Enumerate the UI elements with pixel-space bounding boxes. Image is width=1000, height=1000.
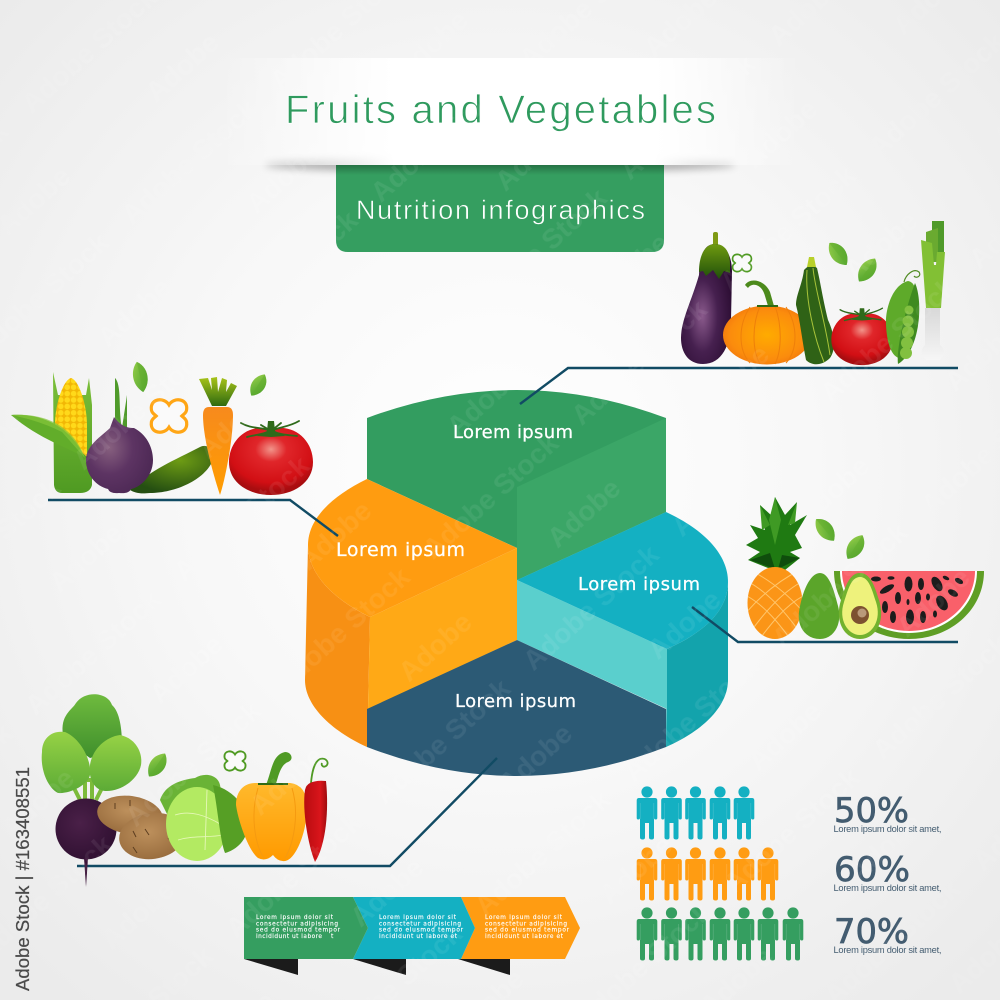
icon: potatoes (95, 792, 188, 863)
icon: chili (304, 759, 328, 862)
ribbon arrow banner (244, 897, 580, 975)
vegetable group: top right (681, 221, 945, 365)
stat: 60% (834, 850, 942, 893)
subtitle panel: Nutrition infographics (356, 195, 645, 225)
stat: 60%: 60% (834, 850, 910, 890)
icon: pineapple (746, 497, 807, 639)
icon: leek (921, 221, 945, 360)
icon: leaf (246, 371, 271, 399)
fold shadows (244, 959, 510, 975)
step: green: sed do eiusmod tempor (256, 928, 341, 934)
segment: green: Lorem ipsum (453, 422, 573, 443)
title: Fruits and Vegetables (285, 88, 716, 132)
3D segmented pie chart (305, 390, 728, 776)
step: teal: sed do eiusmod tempor (379, 928, 464, 934)
icon: yellow pepper (236, 752, 307, 861)
step: green: t (331, 934, 334, 940)
icon: onion (86, 378, 153, 493)
side credit text: Adobe Stock | #163408551 (12, 767, 33, 991)
icon: leaf (824, 238, 853, 269)
icon: pea pod (886, 271, 920, 364)
icon: zucchini (796, 257, 834, 364)
step: orange: sed do eiusmod tempor (485, 928, 570, 934)
segment: orange: Lorem ipsum (336, 539, 465, 561)
icon: carrot (199, 377, 237, 495)
icon: leaf (853, 254, 881, 286)
icon: leaf (143, 749, 171, 781)
step: orange (461, 897, 580, 959)
step: green: consectetur adipisicing (256, 922, 338, 928)
step: orange: consectetur adipisicing (485, 922, 567, 928)
stat: 50%: 50% (834, 791, 909, 831)
segment: navy: Lorem ipsum (455, 691, 576, 712)
icon: tomato (229, 421, 313, 495)
segment: teal (517, 512, 728, 747)
stat: 60%: Lorem ipsum dolor sit amet, (834, 883, 942, 893)
stat: 70% (834, 912, 942, 955)
header: title band (220, 58, 800, 252)
step: green: Lorem ipsum dolor sit (256, 915, 334, 921)
icon: leaf (130, 360, 151, 393)
icon: pepper ring (151, 400, 187, 432)
step: orange: incididunt ut labore et (485, 934, 564, 940)
stat: 50%: Lorem ipsum dolor sit amet, (834, 824, 942, 834)
icon: cucumber (130, 446, 213, 493)
segment: green (367, 390, 666, 580)
step: orange: Lorem ipsum dolor sit (485, 915, 563, 921)
people chart row: 70% (637, 907, 803, 960)
stat: 70%: 70% (834, 912, 909, 952)
segment: orange (305, 479, 517, 747)
icon: watermelon (834, 571, 984, 639)
people chart row: 50% (637, 786, 754, 840)
icon: leaf (811, 514, 840, 545)
step: teal: consectetur adipisicing (379, 922, 461, 928)
icon: cabbage (160, 775, 247, 861)
people chart row: 60% (637, 847, 778, 900)
vegetable group: bottom left (42, 694, 328, 887)
step: teal: incididunt ut labore et (379, 934, 458, 940)
stat: 50% (834, 791, 942, 834)
stat: 70%: Lorem ipsum dolor sit amet, (834, 945, 942, 955)
icon: pepper ring (733, 254, 751, 272)
step: green: incididunt ut labore (256, 934, 322, 940)
connector lines (48, 368, 958, 866)
icon: beet (42, 694, 141, 887)
icon: leaf (842, 531, 869, 563)
icon: eggplant (681, 232, 732, 364)
step: teal: Lorem ipsum dolor sit (379, 915, 457, 921)
icon: pumpkin (723, 281, 811, 364)
icon: tomato (831, 308, 893, 365)
step: teal (353, 897, 475, 959)
vegetable group: top left (11, 360, 313, 495)
icon: avocado half (839, 573, 881, 639)
subtitle panel (336, 165, 664, 252)
step: green (244, 897, 368, 959)
segment: navy (367, 640, 666, 776)
segment: teal: Lorem ipsum (578, 574, 700, 595)
fruit group: right (740, 497, 984, 645)
icon: avocado whole (799, 573, 839, 639)
icon: pepper ring (224, 751, 246, 771)
icon: corn (11, 372, 92, 493)
